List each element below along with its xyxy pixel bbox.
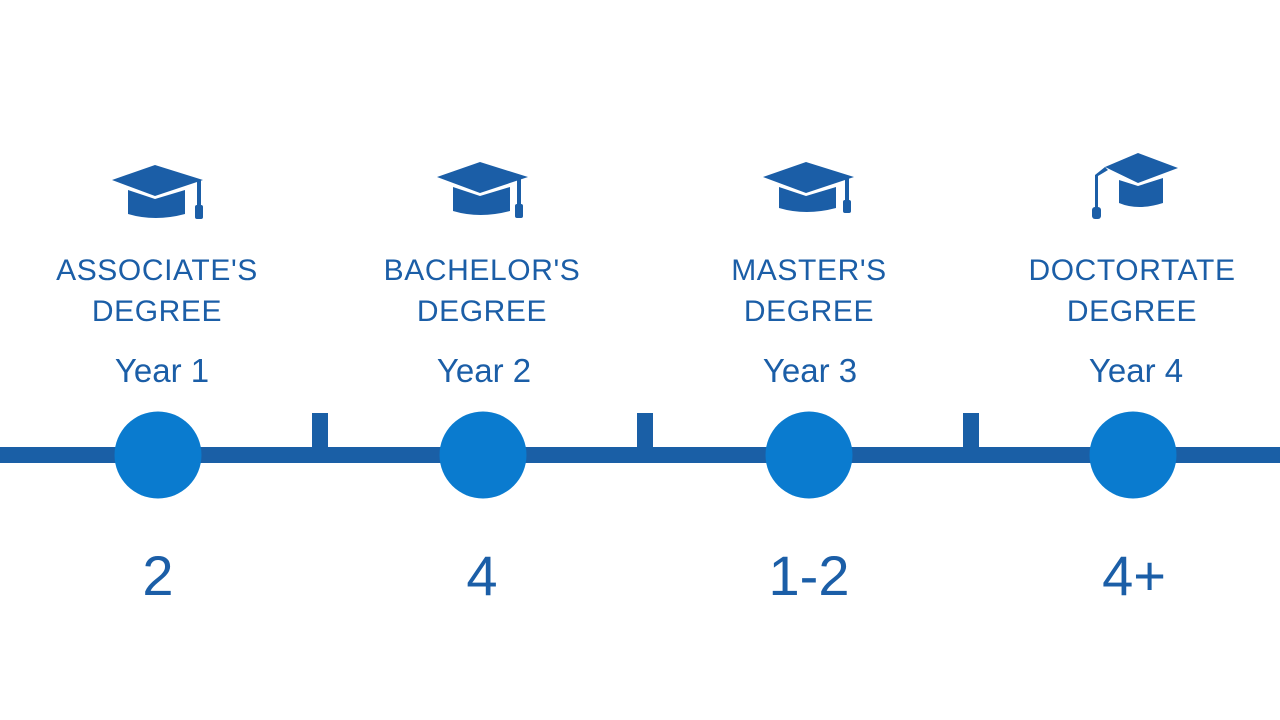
circle 4 [1090,412,1176,498]
year 3: Year 3 [763,352,857,389]
tick 3 [963,413,979,449]
icon: cap 3 [763,162,854,213]
heading: bachelor's: DEGREE [417,295,547,328]
heading: associate's: ASSOCIATE'S [56,254,258,287]
number 1-2: 1-2 [769,544,849,607]
number 4+: 4+ [1102,544,1166,607]
circle 2 [440,412,526,498]
year 2: Year 2 [437,352,531,389]
number 4: 4 [466,544,498,607]
heading: doctorate [1028,254,1236,328]
heading: associate's [56,254,258,328]
number 2: 2 [142,544,174,607]
icon: cap 2 [437,162,528,218]
heading: master's: MASTER'S [731,254,887,287]
tick 2 [637,413,653,449]
tick 1 [312,413,328,449]
heading: bachelor's: BACHELOR'S [384,254,580,287]
icon: cap 1 [112,165,203,219]
heading: master's: DEGREE [744,295,874,328]
circle 3 [766,412,852,498]
heading: doctorate: DEGREE [1067,295,1197,328]
icon: cap 4 [1092,153,1178,219]
heading: master's [731,254,887,328]
heading: doctorate: DOCTORTATE [1028,254,1236,287]
year 4: Year 4 [1089,352,1183,389]
timeline line [0,447,1280,463]
year 1: Year 1 [115,352,209,389]
heading: associate's: DEGREE [92,295,222,328]
heading: bachelor's [384,254,580,328]
circle 1 [114,412,202,498]
